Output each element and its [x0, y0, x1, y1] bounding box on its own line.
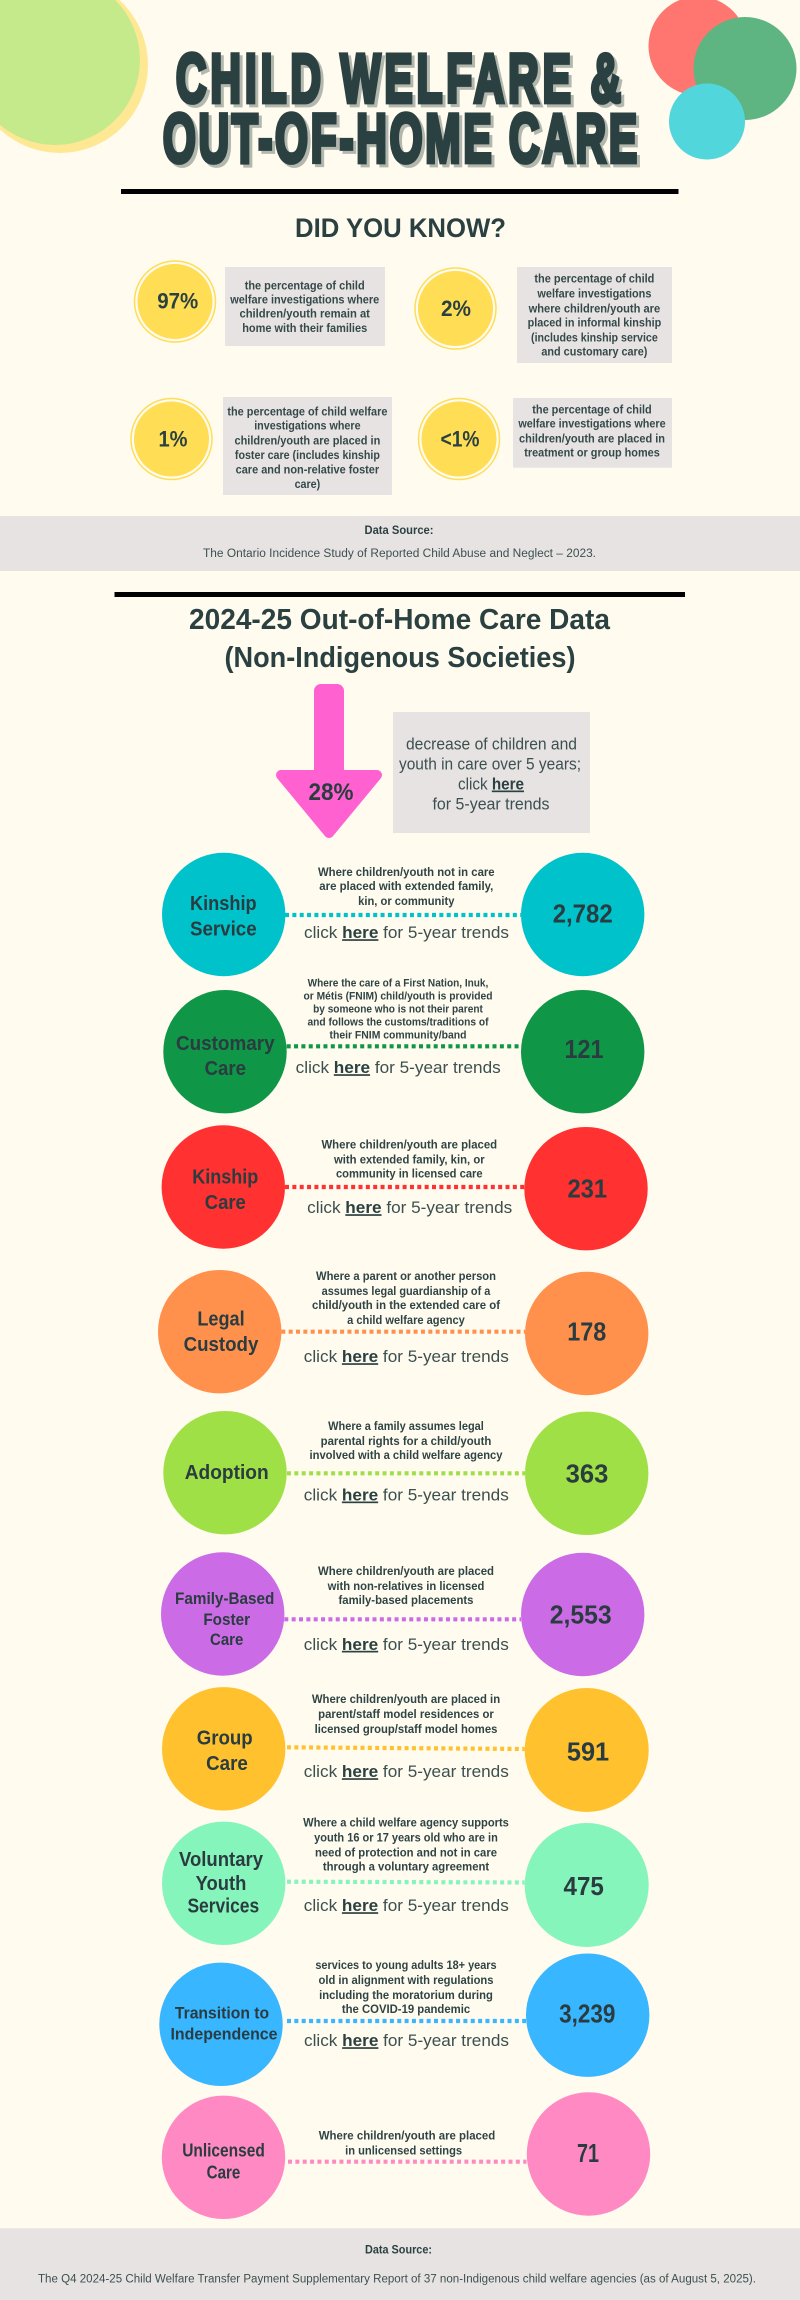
row: kinship service: Where children/youth not in care	[318, 865, 495, 879]
callout: decrease of children in care: for 5-year trends	[432, 794, 550, 814]
data source band: top	[0, 516, 800, 571]
heading: out-of-home care data: 2024-25 Out-of-Home Care Data	[189, 604, 611, 636]
heading: out-of-home care data	[189, 604, 611, 674]
data source band: top: Data Source:	[364, 525, 434, 537]
row: kinship service: kin, or community	[358, 894, 455, 908]
row: unlicensed care: Unlicensed	[182, 2141, 265, 2161]
row: group care: Group	[197, 1726, 253, 1749]
row: customary care: Customary	[176, 1032, 275, 1055]
stat panel: less than 1%: <1%	[440, 426, 480, 452]
title: OUT-OF-HOME CARE	[163, 102, 637, 178]
row: group care: click here for 5-year trends	[304, 1762, 509, 1781]
row: kinship care: with extended family, kin, or	[333, 1152, 485, 1166]
row: customary care: or Métis (FNIM) child/youth is provided	[304, 991, 492, 1003]
row: transition to independence: the COVID-19 pandemic	[342, 2002, 471, 2016]
row: group care: licensed group/staff model homes	[315, 1722, 498, 1736]
row: transition to independence: old in alignment with regulations	[318, 1973, 494, 1987]
row: customary care: their FNIM community/band	[330, 1030, 466, 1042]
row: kinship care	[162, 1125, 648, 1250]
stat panel: 2%: welfare investigations	[537, 286, 652, 300]
row: family-based foster care	[161, 1552, 644, 1676]
stat panel: less than 1%: the percentage of child	[532, 402, 652, 416]
row: family-based foster care: Foster	[203, 1610, 250, 1629]
row: family-based foster care: Family-Based	[175, 1589, 274, 1608]
row: transition to independence: 3,239	[559, 2001, 615, 2029]
data source band: bottom: The Q4 2024-25 Child Welfare Transfer Payment Supplementary Report of 37 non-Indigenous child welfare agencies (as of August 5, 2025).	[38, 2273, 756, 2285]
row: family-based foster care: click here for 5-year trends	[304, 1635, 509, 1654]
row: kinship care: Care	[205, 1191, 246, 1214]
stat panel: 97%: the percentage of child	[245, 278, 365, 292]
data source band: bottom: Data Source:	[365, 2244, 432, 2256]
row: customary care: 121	[564, 1036, 604, 1064]
row: unlicensed care: Where children/youth are placed	[319, 2128, 495, 2142]
title	[163, 42, 640, 181]
row: kinship care: community in licensed care	[336, 1166, 483, 1180]
arrow: 28% decrease	[281, 684, 377, 833]
row: family-based foster care: with non-relatives in licensed	[327, 1579, 484, 1593]
row: legal custody: Custody	[184, 1333, 259, 1356]
stat panel: 97%: children/youth remain at	[239, 306, 370, 320]
row: voluntary youth services: through a voluntary agreement	[323, 1859, 489, 1873]
row: adoption: 363	[566, 1460, 608, 1488]
stat panel: 1%: children/youth are placed in	[234, 434, 380, 448]
row: kinship service: Kinship	[190, 892, 257, 915]
row: unlicensed care: in unlicensed settings	[345, 2143, 463, 2157]
row: adoption: Where a family assumes legal	[328, 1419, 484, 1433]
row: kinship service	[162, 853, 644, 976]
row: voluntary youth services: click here for 5-year trends	[304, 1896, 509, 1915]
row: voluntary youth services: Services	[187, 1895, 259, 1918]
stat panel: 97%	[134, 261, 385, 346]
row: legal custody: assumes legal guardianship of a	[322, 1284, 491, 1298]
row: transition to independence: Transition to	[175, 2003, 269, 2022]
row: kinship care: Kinship	[192, 1165, 258, 1188]
row: voluntary youth services: Youth	[196, 1872, 246, 1895]
row: transition to independence: including the moratorium during	[319, 1988, 493, 2002]
row: legal custody	[158, 1269, 648, 1395]
row: customary care: click here for 5-year trends	[296, 1058, 501, 1077]
title: CHILD WELFARE &	[176, 42, 621, 118]
row: customary care	[163, 978, 644, 1113]
row: customary care: Where the care of a First Nation, Inuk,	[308, 978, 488, 990]
row: voluntary youth services	[162, 1815, 649, 1947]
row: family-based foster care: Care	[210, 1630, 243, 1649]
title: OUT-OF-HOME CARE	[166, 105, 640, 181]
row: family-based foster care: 2,553	[550, 1601, 612, 1629]
row: voluntary youth services: need of protection and not in care	[315, 1845, 497, 1859]
stat panel: 1%: 1%	[158, 426, 188, 452]
row: unlicensed care: Care	[207, 2162, 240, 2182]
heading: out-of-home care data: (Non-Indigenous Societies)	[224, 642, 576, 674]
data source band: bottom	[0, 2228, 800, 2300]
row: adoption	[163, 1411, 648, 1535]
row: voluntary youth services: youth 16 or 17 years old who are in	[314, 1830, 498, 1844]
row: adoption: involved with a child welfare agency	[310, 1448, 503, 1462]
row: legal custody: Legal	[197, 1308, 245, 1331]
row: adoption: parental rights for a child/youth	[321, 1434, 491, 1448]
row: family-based foster care: Where children/youth are placed	[318, 1564, 494, 1578]
stat panel: less than 1%: welfare investigations where	[517, 416, 666, 430]
stat panel: 97%: 97%	[157, 288, 198, 314]
callout: decrease of children in care: click here	[458, 774, 524, 794]
row: legal custody: click here for 5-year trends	[304, 1347, 509, 1366]
row: group care	[162, 1687, 649, 1812]
row: transition to independence: Independence	[170, 2024, 278, 2043]
decorative circles: top right	[648, 0, 796, 160]
stat panel: less than 1%: treatment or group homes	[524, 446, 660, 460]
row: group care: 591	[567, 1739, 609, 1767]
row: transition to independence	[159, 1954, 649, 2086]
row: legal custody: child/youth in the extended care of	[312, 1298, 500, 1312]
stat panel: 2%: the percentage of child	[534, 272, 654, 286]
row: voluntary youth services: Where a child welfare agency supports	[303, 1815, 509, 1829]
row: adoption: click here for 5-year trends	[304, 1486, 509, 1504]
stat panel: 1%: the percentage of child welfare	[227, 404, 388, 418]
stat panel: 1%: care and non-relative foster	[236, 462, 379, 476]
row: kinship service: Service	[190, 918, 257, 941]
row: kinship care: 231	[567, 1176, 607, 1204]
row: transition to independence: click here for 5-year trends	[304, 2031, 509, 2050]
stat panel: 2%: placed in informal kinship	[528, 316, 661, 330]
callout: decrease of children in care: decrease of children and	[406, 734, 577, 754]
stat panel: less than 1%: children/youth are placed in	[519, 432, 665, 446]
row: kinship service: are placed with extended family,	[319, 879, 493, 893]
row: group care: Where children/youth are placed in	[312, 1692, 500, 1706]
stat panel: 2%: and customary care)	[541, 344, 647, 358]
decorative circles: top left	[0, 0, 148, 153]
stat panel: 2%: (includes kinship service	[531, 330, 658, 344]
row: group care: Care	[206, 1752, 248, 1775]
stat panel: 2%: 2%	[441, 296, 471, 321]
row: unlicensed care	[162, 2092, 650, 2219]
stat panel: 1%: foster care (includes kinship	[235, 448, 380, 462]
title: CHILD WELFARE &	[179, 45, 624, 121]
stat panel: 1%	[131, 397, 392, 495]
data source band: top: The Ontario Incidence Study of Reported Child Abuse and Neglect – 2023.	[203, 548, 596, 560]
row: group care: parent/staff model residences or	[318, 1707, 494, 1721]
arrow: 28% decrease: 28%	[308, 779, 354, 806]
row: family-based foster care: family-based placements	[338, 1593, 474, 1607]
row: voluntary youth services: Voluntary	[179, 1848, 264, 1871]
row: legal custody: a child welfare agency	[347, 1313, 465, 1327]
stat panel: less than 1%	[418, 398, 672, 480]
stat panel: 2%	[415, 267, 672, 363]
callout: decrease of children in care	[393, 712, 590, 833]
stat panel: 1%: investigations where	[254, 418, 361, 432]
row: kinship care: Where children/youth are placed	[321, 1137, 497, 1151]
row: legal custody: 178	[567, 1319, 606, 1347]
row: legal custody: Where a parent or another person	[316, 1269, 496, 1283]
callout: decrease of children in care: youth in care over 5 years;	[399, 754, 581, 774]
row: customary care: Care	[205, 1057, 246, 1080]
row: transition to independence: services to young adults 18+ years	[315, 1958, 497, 1972]
row: kinship service: 2,782	[553, 901, 613, 929]
stat panel: 97%: home with their families	[242, 321, 367, 335]
row: customary care: by someone who is not their parent	[313, 1004, 483, 1016]
row: customary care: and follows the customs/traditions of	[308, 1017, 489, 1029]
row: kinship care: click here for 5-year trends	[307, 1198, 512, 1217]
row: voluntary youth services: 475	[564, 1873, 604, 1901]
stat panel: 1%: care)	[295, 477, 320, 491]
stat panel: 97%: welfare investigations where	[229, 292, 379, 306]
heading: did you know: DID YOU KNOW?	[295, 213, 506, 243]
row: adoption: Adoption	[185, 1461, 269, 1484]
stat panel: 2%: where children/youth are	[528, 302, 660, 316]
row: kinship service: click here for 5-year trends	[304, 923, 509, 942]
row: unlicensed care: 71	[577, 2140, 599, 2168]
